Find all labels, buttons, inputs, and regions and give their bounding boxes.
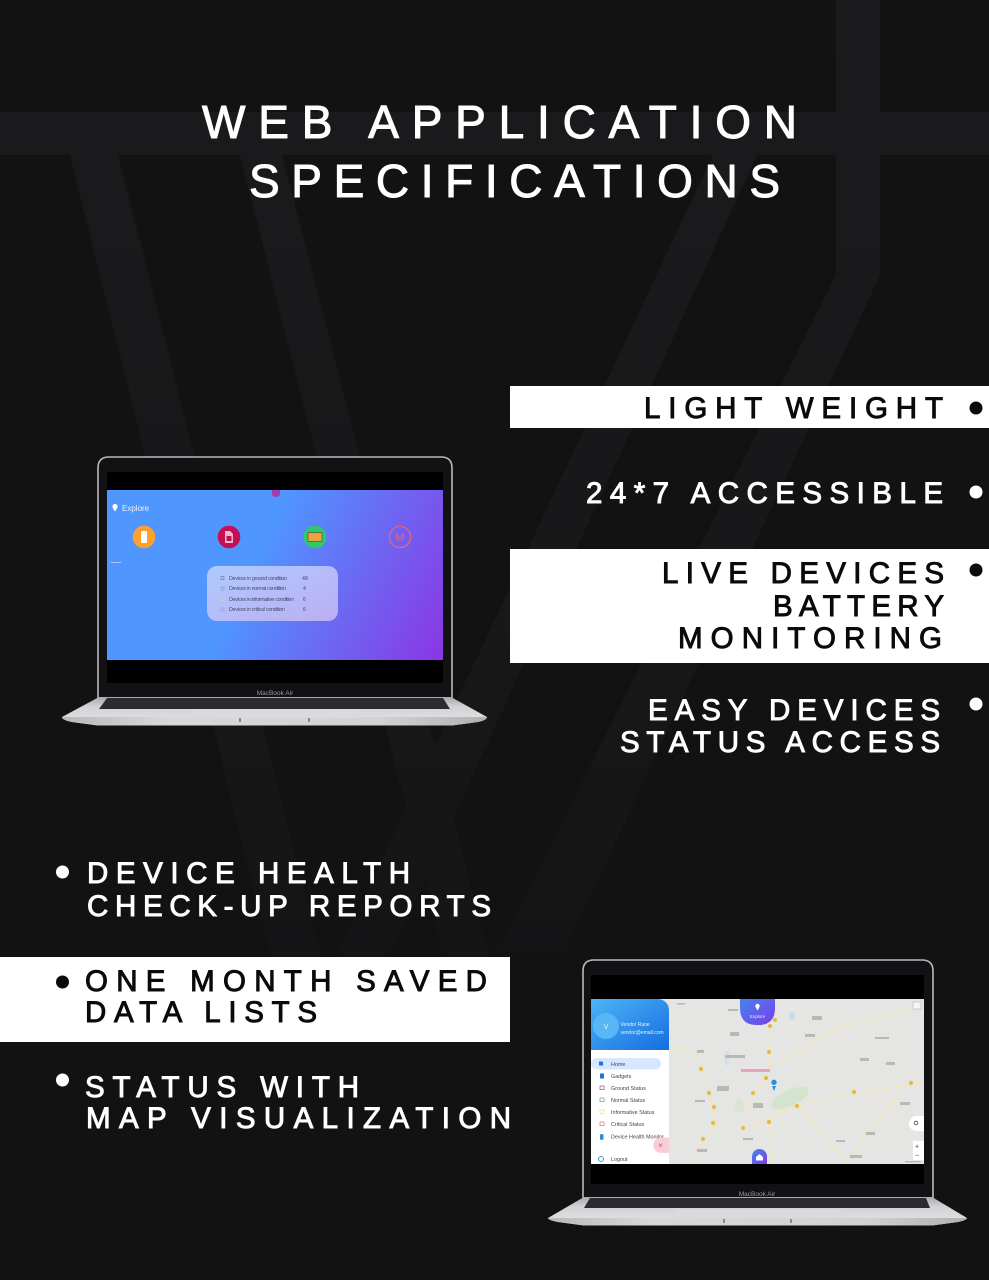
explore screen gradient	[107, 490, 443, 660]
background: faint V logo watermark	[0, 0, 989, 1000]
device status panel: Devices in informative condition	[229, 597, 294, 603]
right list: easy devices status access	[620, 694, 982, 759]
sidebar navigation: Informative Status	[611, 1110, 655, 1116]
left list: one month saved data lists: ONE MONTH SAVED	[85, 965, 487, 998]
close button: ×	[658, 1141, 663, 1150]
device status panel: 48	[302, 576, 308, 582]
right list: live devices battery monitoring: MONITORING	[678, 622, 942, 655]
notification badge	[272, 490, 280, 497]
sidebar navigation: Logout	[611, 1157, 628, 1163]
left list: device health check-up reports: CHECK-UP REPORTS	[87, 890, 491, 923]
map zoom controls: −	[915, 1152, 919, 1160]
right list: light weight	[510, 386, 989, 428]
laptop lid	[583, 960, 933, 1198]
map fullscreen control	[913, 1002, 921, 1009]
right list: light weight: LIGHT WEIGHT	[644, 392, 943, 425]
icon: device monitor	[304, 526, 326, 548]
explore heading: Explore	[122, 504, 150, 513]
sidebar header: Vendor Rane	[620, 1022, 650, 1028]
laptop base	[62, 697, 487, 726]
right list: easy devices status access: EASY DEVICES	[648, 694, 940, 727]
icon: M badge	[389, 526, 411, 548]
right list: live devices battery monitoring	[510, 549, 989, 663]
sidebar navigation: Home	[611, 1062, 625, 1068]
device status panel: Devices in ground condition	[229, 576, 287, 582]
left list: status with map visualization: MAP VISUALIZATION	[86, 1102, 511, 1135]
right list: live devices battery monitoring: LIVE DEVICES	[662, 557, 944, 590]
sidebar navigation: Gadgets	[611, 1074, 632, 1080]
sidebar header: vendor@email.com	[620, 1030, 664, 1036]
laptop base	[548, 1197, 967, 1226]
left list: device health check-up reports	[56, 857, 491, 923]
device status panel: Devices in critical condition	[229, 607, 285, 613]
sidebar header: V	[604, 1024, 609, 1031]
title	[202, 96, 797, 207]
left list: one month saved data lists: DATA LISTS	[85, 996, 317, 1029]
title: WEB APPLICATION	[202, 96, 797, 148]
icon: battery	[133, 526, 155, 548]
sidebar header	[591, 999, 669, 1050]
map	[591, 999, 924, 1164]
map zoom controls: +	[915, 1144, 919, 1150]
explore tab	[740, 999, 775, 1025]
left list: status with map visualization: STATUS WITH	[85, 1071, 359, 1104]
icon: sim card	[218, 526, 240, 548]
right list: 24*7 accessible: 24*7 ACCESSIBLE	[586, 477, 943, 510]
sidebar navigation	[591, 1050, 669, 1164]
left list: one month saved data lists	[0, 957, 510, 1042]
map search button	[909, 1116, 924, 1131]
small screen note	[111, 562, 121, 563]
home tab	[752, 1149, 767, 1164]
device status panel: Devices in normal condition	[229, 586, 286, 592]
device status panel	[207, 566, 338, 621]
laptop screen bezel	[107, 472, 443, 683]
sidebar navigation: Normal Status	[611, 1098, 645, 1104]
left list: device health check-up reports: DEVICE HEALTH	[87, 857, 410, 890]
right list: live devices battery monitoring: BATTERY	[773, 590, 944, 623]
left list: status with map visualization	[56, 1071, 511, 1135]
device status panel: 6	[303, 597, 306, 603]
laptop lid	[98, 457, 452, 698]
device status panel: 4	[303, 586, 306, 592]
map zoom controls	[913, 1141, 924, 1160]
close button	[653, 1138, 669, 1153]
laptop brand label: MacBook Air	[739, 1191, 776, 1198]
device status panel: 6	[303, 607, 306, 613]
laptop screen bezel	[591, 975, 924, 1184]
title: SPECIFICATIONS	[249, 155, 780, 207]
sidebar navigation: Ground Status	[611, 1086, 646, 1092]
explore tab: Explore	[750, 1014, 766, 1019]
laptop brand label: MacBook Air	[257, 690, 294, 697]
icon: M badge: M	[395, 532, 405, 544]
sidebar navigation: Device Health Monitor	[611, 1134, 664, 1140]
laptop: map dashboard	[548, 960, 967, 1226]
right list: easy devices status access: STATUS ACCESS	[620, 726, 940, 759]
laptop: explore dashboard	[62, 457, 487, 726]
sidebar navigation: Critical Status	[611, 1122, 645, 1128]
